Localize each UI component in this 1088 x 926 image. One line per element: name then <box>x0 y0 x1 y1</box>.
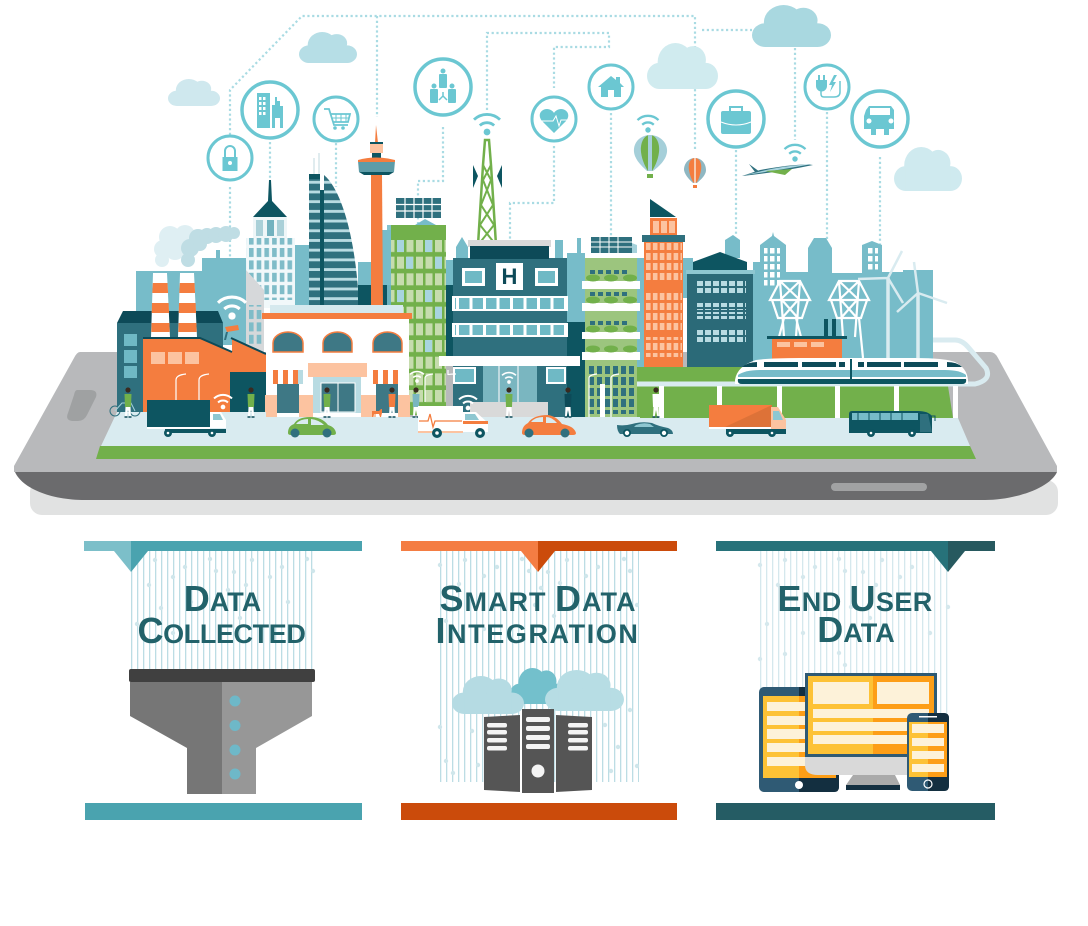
cyclist with bike <box>110 387 140 417</box>
dog <box>372 409 382 417</box>
ground green behind rail <box>637 367 953 418</box>
people <box>110 387 660 417</box>
monitor <box>805 673 937 790</box>
tablet home slot <box>831 483 927 491</box>
orange car <box>522 415 576 438</box>
top ribbon <box>716 541 995 572</box>
rail pillars <box>659 386 958 418</box>
sail skyscraper <box>309 153 359 305</box>
bottom bar <box>401 803 677 820</box>
orange tall building <box>642 199 685 367</box>
panel: data collected <box>84 541 362 820</box>
bottom bar <box>85 803 362 820</box>
tablet top face <box>14 352 1057 472</box>
data rain lines <box>131 551 315 669</box>
background skyline left <box>136 230 740 368</box>
tablet side button <box>67 390 96 421</box>
icon: lock <box>208 136 252 180</box>
bottom bar <box>716 803 995 820</box>
hot air balloon orange <box>684 158 706 188</box>
heading: NTEGRATION <box>447 619 640 649</box>
factory smoke <box>154 225 240 267</box>
shop awnings <box>273 370 402 384</box>
heading: I <box>435 610 447 651</box>
hospital <box>439 240 585 418</box>
terrace green building <box>582 237 640 418</box>
server icon <box>484 709 592 793</box>
icon: people network <box>415 59 471 115</box>
icon: house <box>589 65 633 109</box>
grass strip <box>96 446 976 459</box>
icon: briefcase <box>708 91 764 147</box>
funnel icon <box>129 669 315 794</box>
heading: ATA <box>210 587 261 617</box>
phone <box>907 713 949 791</box>
wind turbines <box>858 251 947 358</box>
power pylons <box>770 281 869 358</box>
teal sedan <box>617 422 673 437</box>
dark base behind tower <box>358 285 456 356</box>
panel: end user data <box>716 541 995 820</box>
wifi signals <box>214 372 516 410</box>
observation tower <box>358 125 395 306</box>
phone shadow <box>30 480 1058 515</box>
security camera with wifi <box>218 297 246 340</box>
panel: smart data integration <box>401 541 677 820</box>
icon: power plug <box>805 65 849 109</box>
icon: car <box>852 91 908 147</box>
heading: E <box>777 578 802 619</box>
data rain lines <box>438 551 639 782</box>
tablet front edge <box>15 472 1057 500</box>
green car <box>288 417 336 438</box>
devices icon <box>759 673 949 792</box>
bus <box>849 411 935 437</box>
green building <box>387 198 446 415</box>
ambulance <box>418 406 488 438</box>
heading: C <box>138 610 164 651</box>
cloud icon group <box>452 668 624 714</box>
airplane <box>742 145 813 176</box>
chimney right <box>178 273 197 337</box>
heading: ND USER <box>802 578 933 619</box>
heading: D <box>184 578 210 619</box>
street lamps <box>425 370 619 418</box>
teal office building <box>686 252 755 367</box>
top ribbon <box>401 541 677 572</box>
heading: MART DATA <box>465 578 636 619</box>
tablet device base <box>14 352 1057 500</box>
heading: D <box>817 609 843 650</box>
street <box>101 412 970 446</box>
heading: ATA <box>843 618 895 648</box>
chimney left <box>151 273 170 337</box>
heading: S <box>440 578 465 619</box>
train <box>735 358 968 384</box>
orange truck <box>709 405 786 437</box>
hot air balloon green <box>634 116 667 178</box>
clouds <box>168 5 962 191</box>
hospital H sign: H <box>502 264 517 289</box>
icon: heart <box>532 97 576 141</box>
dotted network lines <box>230 16 880 400</box>
data rain lines <box>758 551 950 721</box>
background skyline right <box>753 232 933 365</box>
antenna tower with wifi <box>473 114 502 245</box>
white tower <box>246 180 295 355</box>
icon: cart <box>314 97 358 141</box>
tablet <box>759 687 839 792</box>
top ribbon <box>84 541 362 572</box>
rail track <box>637 340 988 384</box>
delivery truck <box>147 400 226 437</box>
heading: OLLECTED <box>163 619 305 649</box>
small factory <box>767 319 847 360</box>
icon: buildings <box>242 82 298 138</box>
factory with chimneys <box>117 273 266 417</box>
hospital H sign <box>496 263 523 290</box>
shop <box>262 305 412 417</box>
